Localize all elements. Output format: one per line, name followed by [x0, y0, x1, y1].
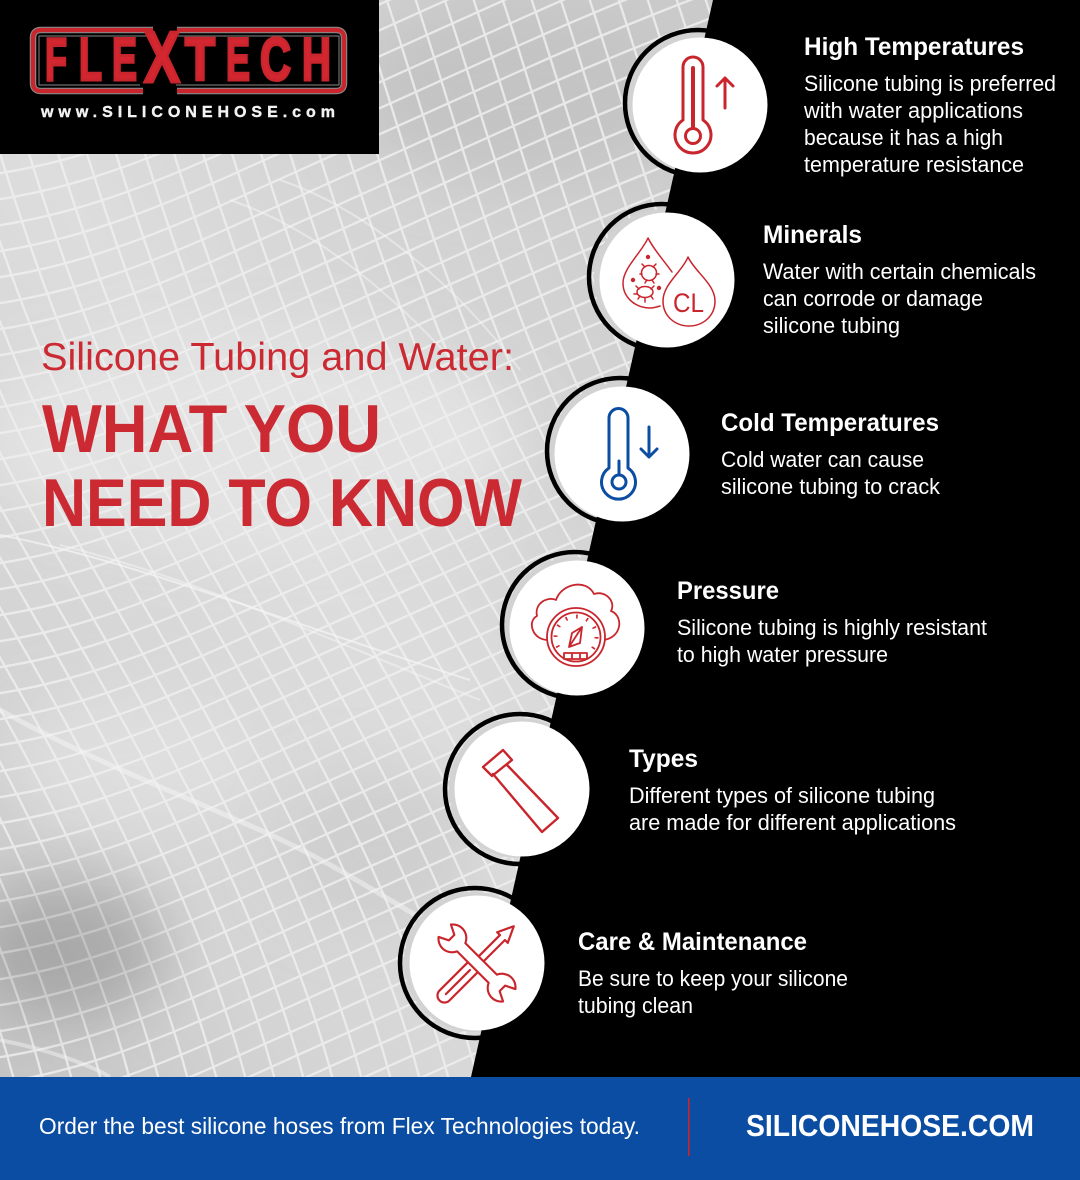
title: NEED TO KNOW: [42, 465, 523, 541]
heading: Minerals: [763, 221, 862, 249]
logo panel: T: [185, 26, 215, 93]
description: Water with certain chemicals: [763, 259, 1036, 284]
description: [677, 615, 987, 667]
title: Silicone Tubing and Water:: [41, 336, 514, 379]
description: temperature resistance: [804, 152, 1024, 177]
item: pressure: [510, 560, 987, 696]
logo panel: www.SILICONEHOSE.com: [40, 104, 335, 121]
logo panel: E: [226, 26, 250, 93]
description: to high water pressure: [677, 642, 888, 667]
icon label: CL: [673, 288, 704, 318]
icon dots: [631, 255, 661, 290]
icon: water drops: [623, 238, 715, 326]
heading: Care & Maintenance: [578, 928, 807, 956]
icon: thermometer down: [602, 408, 657, 499]
description: because it has a high: [804, 125, 1003, 150]
footer call to action: Order the best silicone hoses from Flex Technologies today.: [39, 1113, 640, 1139]
heading: Types: [629, 745, 698, 773]
item: minerals: [600, 212, 1036, 348]
black panel: [471, 0, 1080, 1077]
description: [763, 259, 1036, 338]
description: [721, 447, 941, 499]
logo panel: H: [302, 26, 331, 93]
description: are made for different applications: [629, 810, 956, 835]
icon: screwdriver and wrench: [434, 921, 519, 1006]
description: [803, 71, 1056, 177]
background: silicone mesh photo: [0, 0, 760, 1077]
item: high temperatures: [632, 33, 1056, 177]
title: [41, 336, 523, 541]
heading: Cold Temperatures: [721, 409, 939, 437]
item: care and maintenance: [410, 896, 848, 1030]
description: Be sure to keep your silicone: [578, 966, 848, 991]
icon: pressure gauge in cloud: [532, 585, 619, 666]
logo panel: [0, 0, 379, 154]
icon: thermometer up: [675, 57, 733, 153]
description: can corrode or damage: [763, 286, 983, 311]
item: types: [454, 722, 956, 856]
description: Cold water can cause: [721, 447, 924, 472]
logo panel: L: [79, 26, 102, 93]
item: cold temperatures: [554, 386, 941, 522]
heading: High Temperatures: [804, 33, 1024, 61]
footer bar: [0, 1077, 1080, 1180]
logo panel: E: [112, 26, 137, 93]
circle rings behind black panel: [400, 30, 771, 1038]
description: [629, 783, 956, 835]
heading: Pressure: [677, 577, 779, 605]
logo panel: C: [260, 26, 291, 93]
logo panel: F: [45, 26, 67, 93]
description: silicone tubing: [763, 313, 900, 338]
footer website: SILICONEHOSE.COM: [746, 1108, 1034, 1143]
description: [578, 966, 848, 1018]
description: with water applications: [803, 98, 1023, 123]
description: tubing clean: [578, 993, 693, 1018]
logo panel: X: [144, 18, 180, 98]
description: Different types of silicone tubing: [629, 783, 935, 808]
description: Silicone tubing is preferred: [804, 71, 1056, 96]
title: WHAT YOU: [42, 391, 381, 467]
icon: tube: [483, 750, 558, 832]
description: silicone tubing to crack: [721, 474, 941, 499]
description: Silicone tubing is highly resistant: [677, 615, 987, 640]
